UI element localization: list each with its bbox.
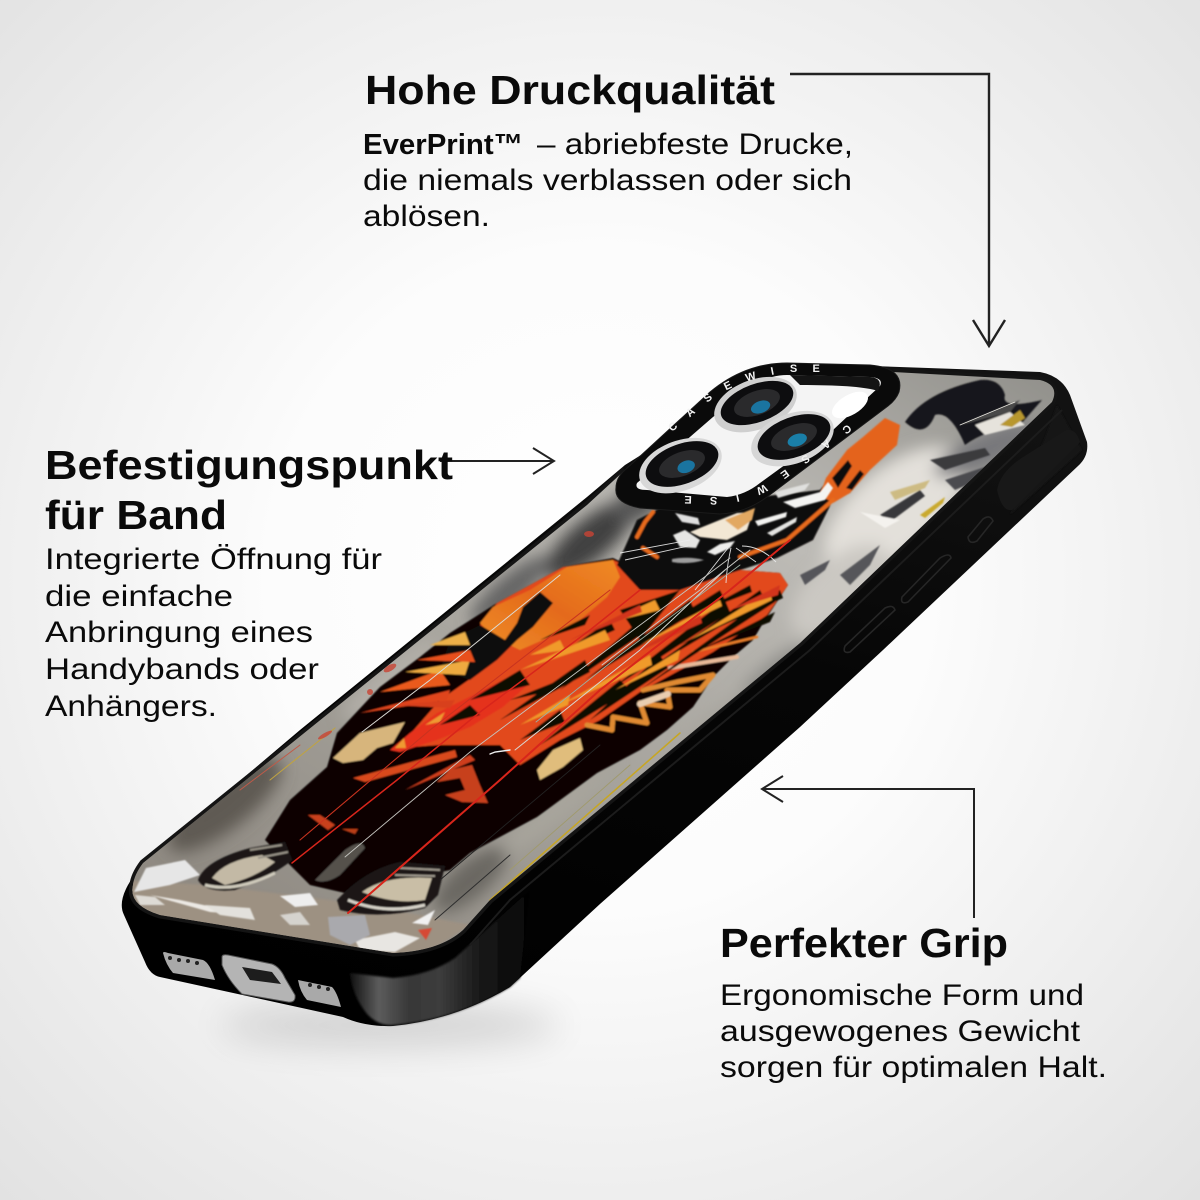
- figure dark silhouette: [265, 558, 788, 893]
- camera ring: [616, 363, 900, 514]
- jacket central mass: [398, 560, 788, 765]
- lens left: [632, 427, 729, 504]
- heading: Befestigungspunkt für Band: Befestigungspunkt: [45, 442, 453, 488]
- jacket upper shoulder: [480, 560, 620, 650]
- heading: Befestigungspunkt für Band: für Band: [45, 492, 227, 538]
- text block: grip: [720, 920, 1107, 1084]
- body: grip: sorgen für optimalen Halt.: [720, 1051, 1107, 1084]
- body: print quality: – abriebfeste Drucke,: [537, 128, 853, 161]
- plate glint: [828, 386, 872, 424]
- red splatter: [317, 531, 594, 741]
- arrow: print quality: [790, 74, 1005, 346]
- whiskers: [620, 540, 776, 590]
- body: grip: Ergonomische Form und: [720, 979, 1084, 1012]
- heading: Hohe Druckqualität: Hohe Druckqualität: [365, 67, 775, 113]
- lens top: [707, 366, 804, 443]
- shoe right: [337, 862, 445, 915]
- phone case: [122, 363, 1087, 1026]
- bottom ports: [163, 952, 341, 1007]
- floor: [132, 880, 468, 953]
- body: strap attachment: die einfache: [45, 580, 233, 613]
- case artwork: tiger in orange jacket: [120, 360, 1080, 970]
- side wall sheen: [1010, 405, 1082, 515]
- heading: Befestigungspunkt für Band: [45, 442, 453, 538]
- body: grip: ausgewogenes Gewicht: [720, 1015, 1081, 1048]
- inner shadow: [790, 375, 880, 391]
- shadow under phone: [220, 1005, 560, 1045]
- ring lettering bottom: C A S E W I S E: [684, 426, 851, 505]
- text block: print quality: [363, 67, 853, 233]
- ring lettering top: C A S E W I S E: [669, 364, 820, 430]
- case body silhouette: [122, 363, 1087, 1026]
- body: print quality: die niemals verblassen oder sich: [363, 164, 852, 197]
- black spikes on jacket: [440, 585, 783, 745]
- camera plate: [636, 375, 881, 497]
- shin grey patch: [315, 843, 365, 882]
- hood dark: [617, 455, 880, 590]
- red chest patch: [390, 680, 530, 752]
- left sleeve spikes: [360, 632, 475, 713]
- shoe left: [198, 842, 292, 891]
- left speaker: [163, 952, 215, 980]
- right speaker: [298, 980, 341, 1007]
- lens right: [744, 400, 841, 477]
- body: print quality: EverPrint™: [363, 129, 523, 161]
- body: strap attachment: Anhängers.: [45, 690, 217, 723]
- body: strap attachment: [45, 543, 382, 723]
- body: print quality: [363, 128, 853, 233]
- arrow: strap attachment: [440, 448, 554, 474]
- hood orange top: [820, 418, 900, 503]
- wall clouds and dust: [155, 412, 1042, 923]
- lower sleeve and hem strokes: [308, 750, 488, 834]
- side ridge line: [470, 410, 1062, 945]
- paint drips and fine lines: [240, 402, 1015, 920]
- corner highlight: [350, 890, 530, 1025]
- camera bump: [615, 362, 900, 514]
- art background: [120, 360, 1080, 970]
- raised rim: [132, 372, 1054, 953]
- deep-red spikes on jacket: [570, 585, 780, 660]
- tiger face: [672, 482, 833, 563]
- body: strap attachment: Integrierte Öffnung für: [45, 543, 382, 576]
- amber spikes on jacket: [520, 590, 772, 725]
- body: grip: [720, 979, 1107, 1084]
- side buttons: [844, 430, 1080, 652]
- figure: [198, 418, 900, 915]
- amber flecks chest: [395, 712, 445, 748]
- heading: Perfekter Grip: Perfekter Grip: [720, 920, 1008, 966]
- hood orange edge: [637, 500, 833, 557]
- body: strap attachment: Anbringung eines: [45, 616, 313, 649]
- body: strap attachment: Handybands oder: [45, 653, 319, 686]
- hood stripes: [832, 460, 864, 490]
- hands: [333, 722, 405, 763]
- black patch on shoulder: [440, 592, 553, 680]
- right sleeve stripes: [587, 637, 757, 730]
- charging port: [222, 955, 295, 1002]
- body: print quality: ablösen.: [363, 200, 490, 233]
- paper scraps: [134, 860, 200, 892]
- arrow: grip: [762, 776, 974, 918]
- black brush top right: [800, 380, 1042, 585]
- text block: strap attachment: [45, 442, 453, 723]
